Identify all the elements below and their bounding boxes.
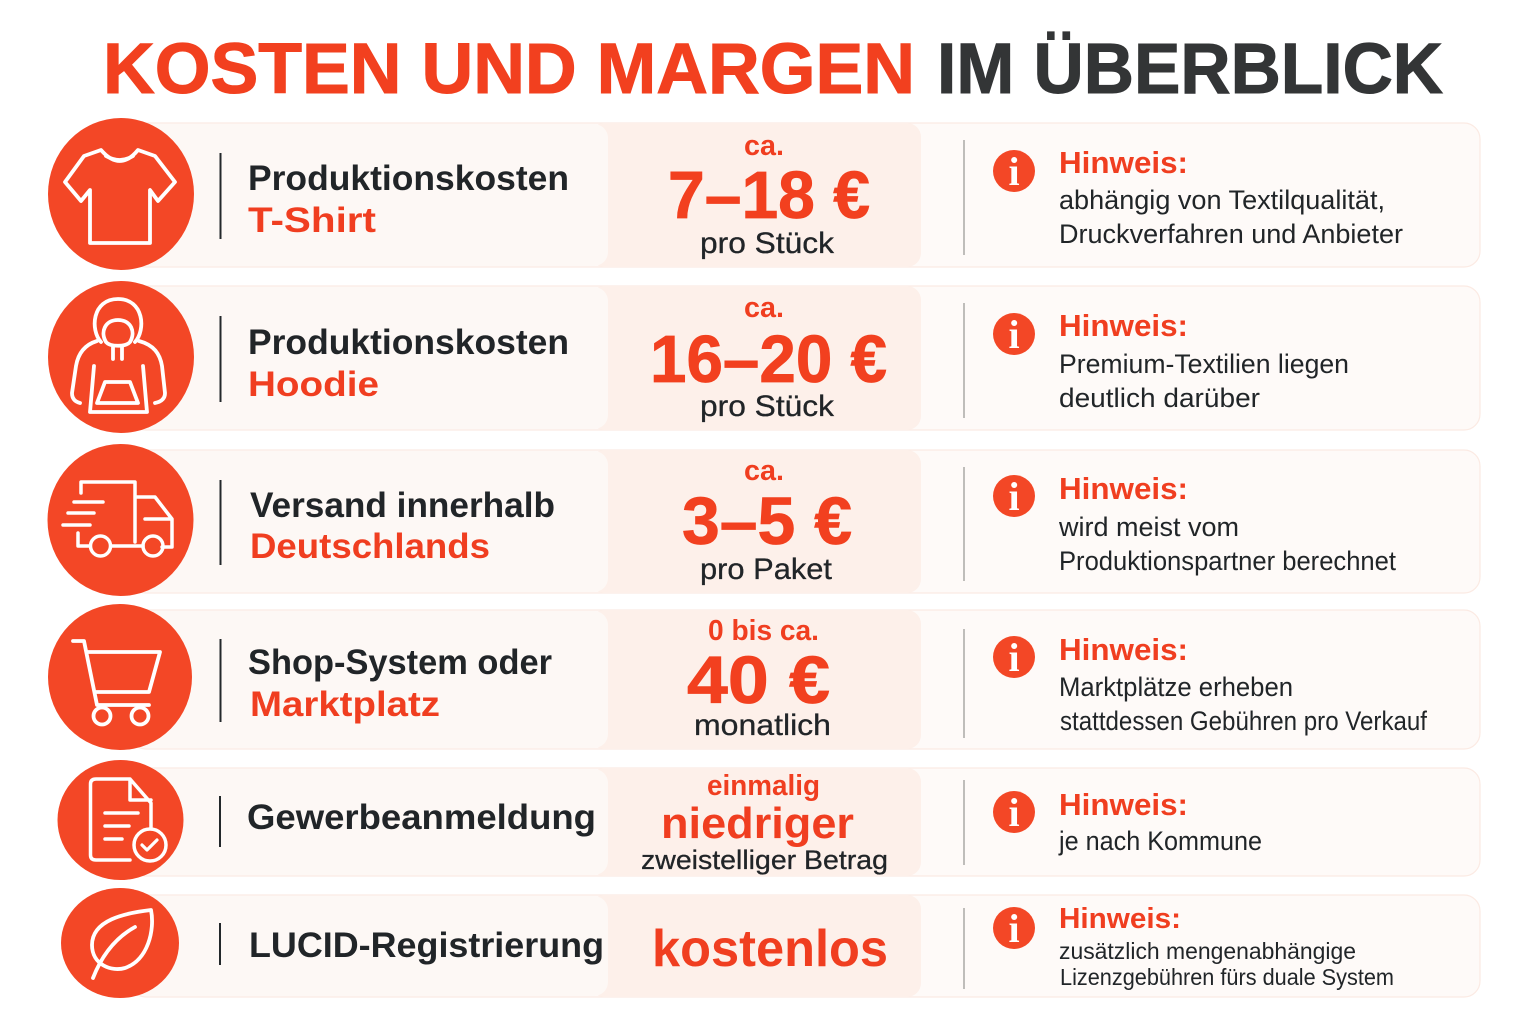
note: Premium-Textilien: deutlich darüber — [1059, 383, 1260, 413]
label: Produktionskosten Hoodie: Hoodie — [248, 365, 379, 404]
label: Produktionskosten T-Shirt — [248, 159, 569, 240]
icon: info — [993, 906, 1035, 951]
icon: info — [993, 312, 1035, 357]
icon: delivery truck — [48, 444, 194, 596]
note: Marktplätze — [1059, 632, 1427, 736]
label: Produktionskosten T-Shirt: T-Shirt — [248, 201, 376, 240]
note: Premium-Textilien — [1059, 308, 1349, 413]
value: kostenlos: kostenlos — [652, 920, 888, 978]
value: 3–5 € pro Paket: pro Paket — [700, 553, 833, 586]
label: Versand innerhalb Deutschlands: Deutschlands — [250, 527, 490, 566]
note: Produktionspartner: Hinweis: — [1059, 471, 1188, 506]
label: Gewerbeanmeldung: Gewerbeanmeldung — [247, 798, 596, 837]
title: IM ÜBERBLICK — [937, 30, 1443, 109]
note: je nach Kommune: Hinweis: — [1059, 787, 1188, 822]
note: Marktplätze: Marktplätze erheben — [1059, 672, 1293, 702]
label: LUCID-Registrierung: LUCID-Registrierung — [249, 926, 604, 965]
panel: Produktionskosten T-Shirt — [48, 118, 1480, 270]
value: 0 bis ca. 40 € monatlich: monatlich — [694, 709, 831, 742]
panel: Gewerbeanmeldung — [58, 760, 1480, 880]
note: Marktplätze: stattdessen Gebühren pro Verkauf — [1060, 706, 1427, 736]
note: Produktionspartner: wird meist vom — [1058, 512, 1239, 542]
icon: info: i — [1008, 149, 1020, 194]
label: Produktionskosten Hoodie — [248, 323, 569, 404]
value: 7–18 € pro Stück: ca. — [744, 130, 784, 162]
note: Textilqualität — [1059, 145, 1403, 249]
value: 16–20 € pro Stück: 16–20 € — [650, 322, 887, 397]
value: einmalig niedriger zweistelliger Betrag — [641, 770, 888, 875]
icon: shopping cart — [48, 604, 192, 750]
title — [103, 30, 1443, 109]
value: 16–20 € pro Stück: pro Stück — [700, 390, 835, 423]
icon: info: i — [1008, 312, 1020, 357]
note: Premium-Textilien: Hinweis: — [1059, 308, 1188, 343]
icon: info — [993, 149, 1035, 194]
value: 16–20 € pro Stück: ca. — [744, 292, 784, 324]
icon: hoodie — [48, 281, 194, 433]
note: Lizenzgebühren: Hinweis: — [1059, 903, 1181, 935]
icon: info: i — [1008, 790, 1020, 835]
value: 0 bis ca. 40 € monatlich: 0 bis ca. — [708, 615, 819, 647]
note: je nach Kommune — [1058, 787, 1262, 856]
value: 3–5 € pro Paket: ca. — [744, 455, 784, 487]
value: 7–18 € pro Stück: pro Stück — [700, 227, 835, 260]
note: Produktionspartner — [1058, 471, 1396, 576]
label: Shop-System oder Marktplatz: Marktplatz — [250, 685, 440, 724]
note: Textilqualität: Druckverfahren und Anbieter — [1059, 219, 1403, 249]
value: 7–18 € pro Stück: 7–18 € — [668, 158, 870, 233]
label: Versand innerhalb Deutschlands: Versand innerhalb — [250, 486, 555, 525]
label: Shop-System oder Marktplatz — [248, 643, 552, 724]
icon: info: i — [1008, 906, 1020, 951]
icon: leaf — [61, 888, 179, 998]
value: einmalig niedriger zweistelliger Betrag: niedriger — [661, 799, 854, 848]
value: 3–5 € pro Paket: 3–5 € — [682, 484, 852, 559]
note: Premium-Textilien: Premium-Textilien liegen — [1059, 349, 1349, 379]
icon: info — [993, 790, 1035, 835]
panel: LUCID-Registrierung — [61, 888, 1480, 998]
label: Shop-System oder Marktplatz: Shop-System oder — [248, 643, 552, 682]
icon: info — [993, 635, 1035, 680]
panel: Shop-System oder Marktplatz — [48, 604, 1480, 750]
value: einmalig niedriger zweistelliger Betrag: einmalig — [707, 770, 820, 802]
label: Produktionskosten Hoodie: Produktionskosten — [248, 323, 569, 362]
value: 0 bis ca. 40 € monatlich: 40 € — [687, 643, 830, 718]
note: je nach Kommune: je nach Kommune — [1058, 826, 1262, 856]
note: Produktionspartner: Produktionspartner berechnet — [1059, 546, 1396, 576]
panel: Produktionskosten Hoodie — [48, 281, 1480, 433]
icon: document with check — [58, 760, 184, 880]
icon: info — [993, 474, 1035, 519]
icon: info: i — [1008, 474, 1020, 519]
icon: t-shirt — [48, 118, 194, 270]
note: Lizenzgebühren — [1059, 903, 1394, 990]
label: Versand innerhalb Deutschlands — [250, 486, 555, 566]
panel: Versand innerhalb Deutschlands — [48, 444, 1480, 596]
note: Textilqualität: Hinweis: — [1059, 145, 1188, 180]
value: 7–18 € pro Stück — [668, 130, 870, 260]
title: KOSTEN UND MARGEN — [103, 30, 915, 109]
icon: info: i — [1008, 635, 1020, 680]
value: einmalig niedriger zweistelliger Betrag: zweistelliger Betrag — [641, 845, 888, 875]
note: Marktplätze: Hinweis: — [1059, 632, 1188, 667]
note: Lizenzgebühren: Lizenzgebühren fürs duale System — [1060, 964, 1394, 990]
value: 16–20 € pro Stück — [650, 292, 887, 423]
value: 0 bis ca. 40 € monatlich — [687, 615, 831, 742]
note: Textilqualität: abhängig von Textilqualität, — [1059, 185, 1385, 215]
value: 3–5 € pro Paket — [682, 455, 852, 586]
note: Lizenzgebühren: zusätzlich mengenabhängige — [1059, 938, 1356, 964]
label: Produktionskosten T-Shirt: Produktionskosten — [248, 159, 569, 198]
